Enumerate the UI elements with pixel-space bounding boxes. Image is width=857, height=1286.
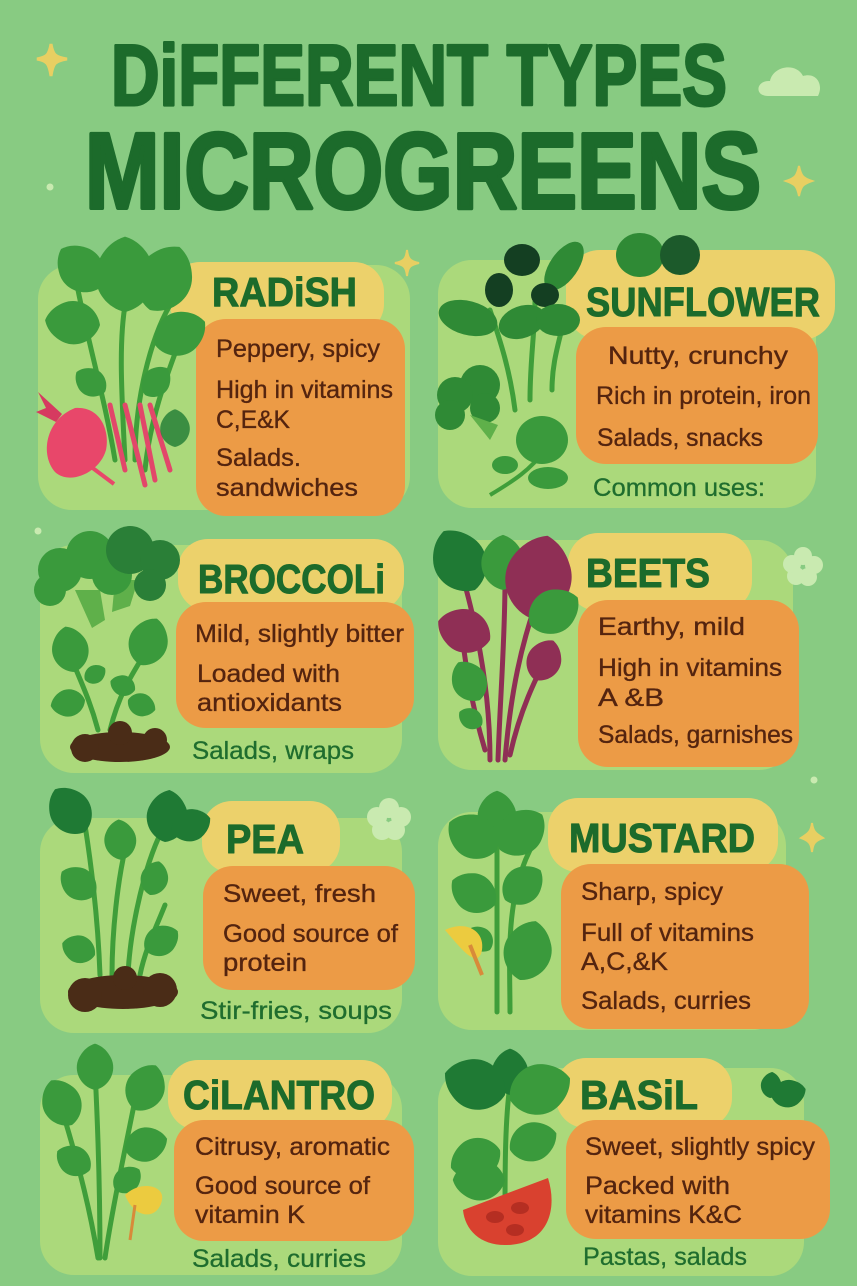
text block: A &B [598,684,664,712]
caption: Stir-fries, soups [200,997,392,1025]
text block: Full of vitamins [581,919,754,947]
text block: C,E&K [216,406,290,434]
icon: cilantro plant [34,1044,173,1258]
icon: basil plant [436,1049,809,1245]
text block: Peppery, spicy [216,335,381,363]
text block: Sweet, slightly spicy [585,1133,816,1161]
panel: pea [38,777,415,1033]
caption: Pastas, salads [583,1243,747,1271]
icon: cloud [758,67,820,96]
text block: sandwiches [216,474,358,502]
icon: flower right [783,547,823,586]
heading: PEA [226,816,304,862]
text block [581,878,754,1015]
caption: Salads, wraps [192,737,354,765]
text block [223,880,398,977]
caption: Salads, curries [192,1245,366,1273]
heading: BASiL [580,1072,698,1118]
decorative dots [34,184,818,784]
text block: antioxidants [197,689,342,717]
text block: vitamins K&C [585,1201,742,1229]
text block [596,342,811,452]
text block: Rich in protein, iron [596,382,811,410]
icon: broccoli plant [34,526,180,762]
text block: Earthy, mild [598,613,745,641]
icon: pea plant [38,777,216,1012]
text block: protein [223,949,307,977]
text block: Mild, slightly bitter [195,620,404,648]
panel: cilantro [34,1044,414,1275]
icon: beet plant [421,519,589,760]
icon: sparkle centre [395,250,419,276]
text block: Packed with [585,1172,730,1200]
text block [585,1133,816,1229]
panel: sunflower [435,233,835,508]
text block: Salads, snacks [597,424,763,452]
icon: mustard plant [438,791,559,1012]
text block: Nutty, crunchy [608,342,789,370]
text block [195,620,404,717]
text block: High in vitamins [216,376,393,404]
text block [598,613,793,749]
text block [216,335,393,502]
text block: vitamin K [195,1201,305,1229]
panel: radish [36,234,410,516]
text block: Salads, curries [581,987,751,1015]
panel: basil [436,1049,830,1276]
heading: BEETS [586,550,710,596]
text block: Salads. [216,444,301,472]
icon: sparkle mustard [801,823,823,852]
text block: Good source of [195,1172,370,1200]
heading: BROCCOLi [198,556,385,602]
panel: beets [421,519,799,770]
icon: radish plant [36,234,214,485]
title [85,28,761,231]
heading: MUSTARD [569,815,755,861]
panel: broccoli [34,526,414,773]
icon: sparkle right [786,166,812,196]
text block: Loaded with [197,660,340,688]
icon: sunflower plant [435,233,700,495]
text block: Sweet, fresh [223,880,376,908]
text block: Sharp, spicy [581,878,724,906]
text block: Salads, garnishes [598,721,793,749]
heading: SUNFLOWER [586,279,820,325]
text block: Citrusy, aromatic [195,1133,390,1161]
caption: Common uses: [593,474,765,502]
heading: CiLANTRO [183,1072,375,1118]
icon: flower centre [367,798,411,840]
text block: Good source of [223,920,398,948]
heading: RADiSH [212,269,357,315]
text block: High in vitamins [598,654,782,682]
text block [195,1133,390,1229]
text block: A,C,&K [581,948,668,976]
icon: sparkle top left [37,44,67,76]
panel: mustard [438,791,809,1030]
